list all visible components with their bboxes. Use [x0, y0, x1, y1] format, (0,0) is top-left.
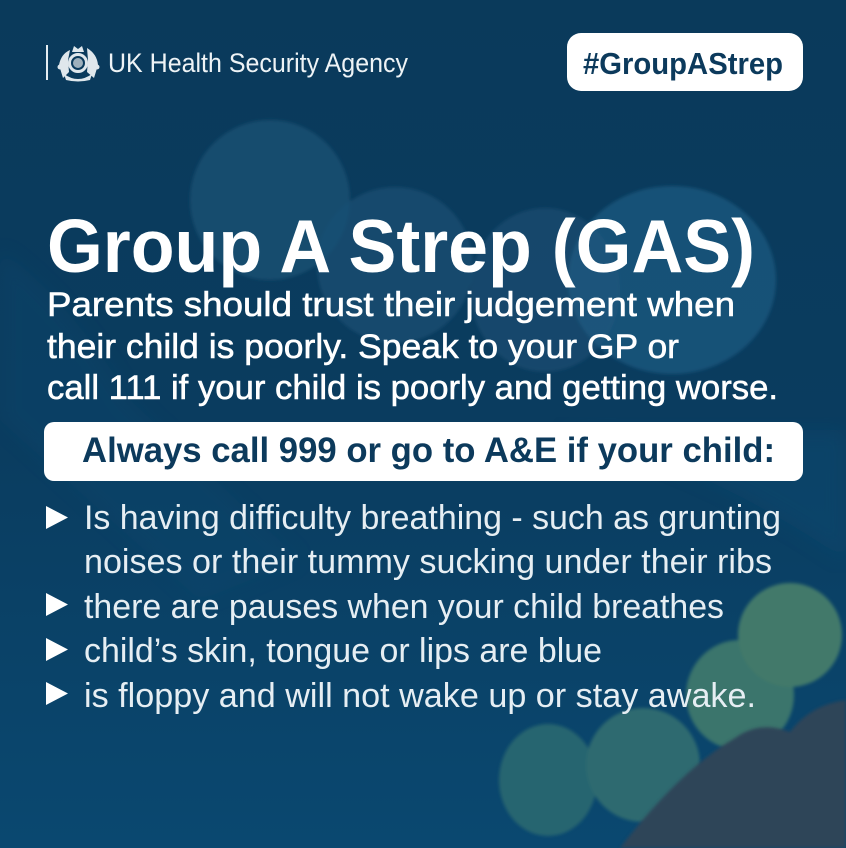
reddish tissue: [620, 700, 846, 848]
bullet 3: child’s skin, tongue or lips are blue: [84, 632, 602, 670]
symptom list: [46, 499, 781, 715]
icon: royal crest: [58, 46, 100, 82]
bacteria cells: lower green: [499, 583, 842, 836]
intro paragraph: [47, 286, 778, 407]
bullet 4: is floppy and will not wake up or stay awake.: [84, 677, 756, 715]
bacteria cells: upper blue: [190, 120, 776, 374]
bullet 2: there are pauses when your child breathes: [84, 588, 724, 626]
bullet 1: noises or their tummy sucking under their ribs: [84, 543, 772, 581]
emergency banner: Always call 999 or go to A&E if your child:: [82, 431, 775, 470]
intro paragraph: call 111 if your child is poorly and getting worse.: [47, 369, 778, 407]
hashtag pill: [567, 33, 803, 91]
title: Group A Strep (GAS): [47, 204, 755, 288]
emergency banner: [44, 422, 803, 481]
bullet 1: [46, 499, 781, 581]
hashtag pill: #GroupAStrep: [583, 46, 783, 81]
logo wordmark: UK Health Security Agency: [108, 48, 408, 78]
intro paragraph: Parents should trust their judgement when: [47, 286, 735, 324]
logo divider: [46, 45, 48, 80]
logo: [46, 45, 408, 82]
bullet 1: Is having difficulty breathing - such as grunting: [84, 499, 781, 537]
intro paragraph: their child is poorly. Speak to your GP or: [47, 328, 679, 366]
